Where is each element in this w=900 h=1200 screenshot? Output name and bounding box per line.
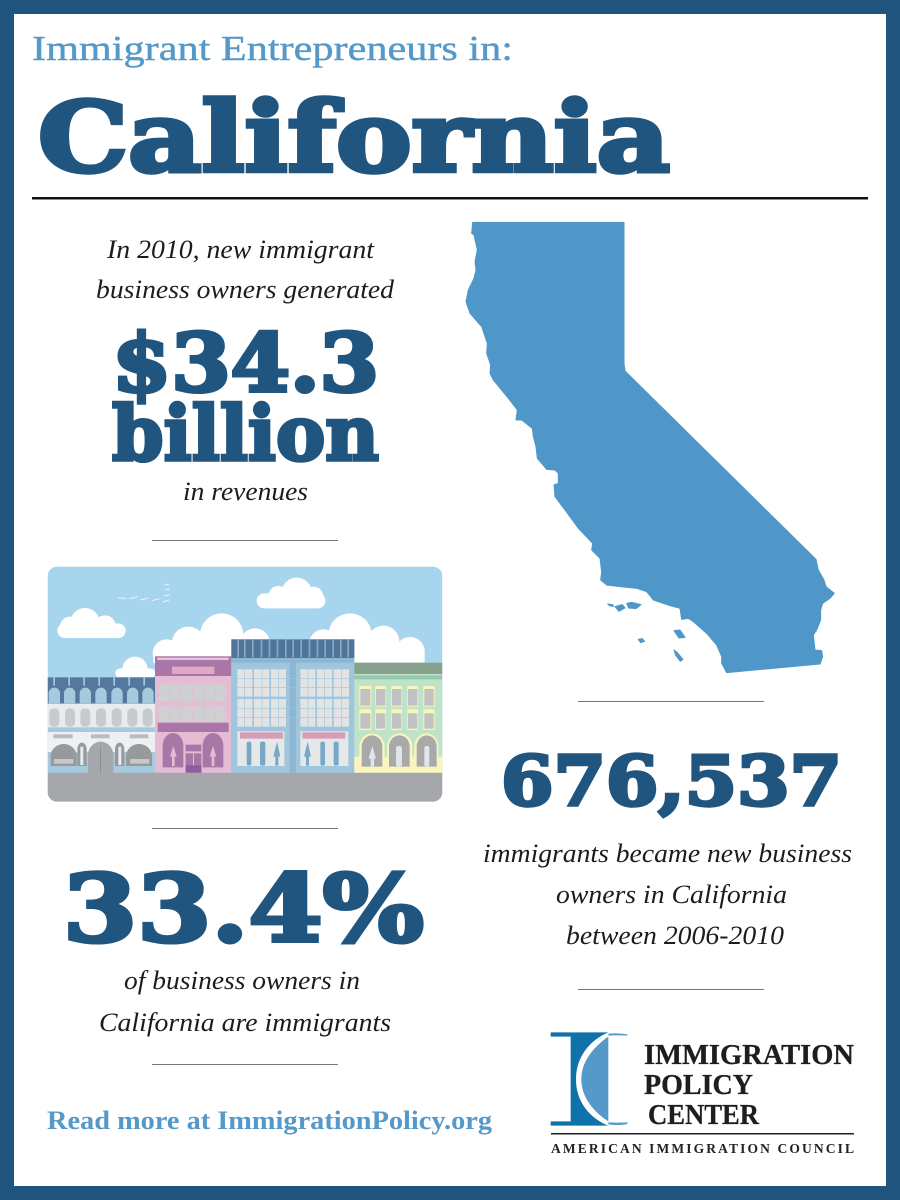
clouds: [57, 578, 425, 682]
building 1: [48, 677, 155, 773]
owners figure: 676,537: [501, 742, 842, 822]
stat: new business owners: [483, 742, 852, 950]
street: [48, 773, 442, 803]
stat: revenues: [96, 235, 395, 506]
logo wordmark: [644, 1039, 854, 1131]
share caption: of business owners in: [124, 966, 360, 995]
share caption: [99, 966, 391, 1037]
revenue unit: billion: [112, 389, 379, 478]
share figure: 33.4%: [63, 854, 424, 963]
link: Read more at ImmigrationPolicy.org: [47, 1106, 492, 1135]
owners caption: immigrants became new business: [483, 839, 852, 868]
logo mark: [551, 1032, 627, 1126]
logo wordmark: IMMIGRATION: [644, 1039, 854, 1071]
logo wordmark: CENTER: [648, 1099, 760, 1131]
building 2: [155, 656, 231, 773]
building 4: [354, 663, 442, 773]
owners caption: between 2006-2010: [566, 921, 784, 950]
title: California: [38, 81, 670, 194]
owners caption: [483, 839, 852, 950]
map of California: [466, 222, 834, 673]
illustration: storefronts: [48, 566, 442, 802]
revenue caption: in revenues: [183, 477, 308, 506]
building 3: [231, 639, 354, 773]
stat: share of owners: [63, 854, 424, 1037]
logo wordmark: POLICY: [644, 1069, 753, 1101]
owners caption: owners in California: [556, 880, 787, 909]
revenue intro text: [96, 235, 395, 304]
revenue intro text: In 2010, new immigrant: [106, 235, 375, 264]
revenue figure: $34.3: [112, 316, 379, 410]
revenue intro text: business owners generated: [96, 275, 395, 304]
birds: [117, 584, 170, 602]
logo: Immigration Policy Center: [551, 1032, 854, 1156]
subtitle: Immigrant Entrepreneurs in:: [32, 29, 513, 68]
logo tagline: AMERICAN IMMIGRATION COUNCIL: [551, 1141, 854, 1156]
share caption: California are immigrants: [99, 1008, 391, 1037]
